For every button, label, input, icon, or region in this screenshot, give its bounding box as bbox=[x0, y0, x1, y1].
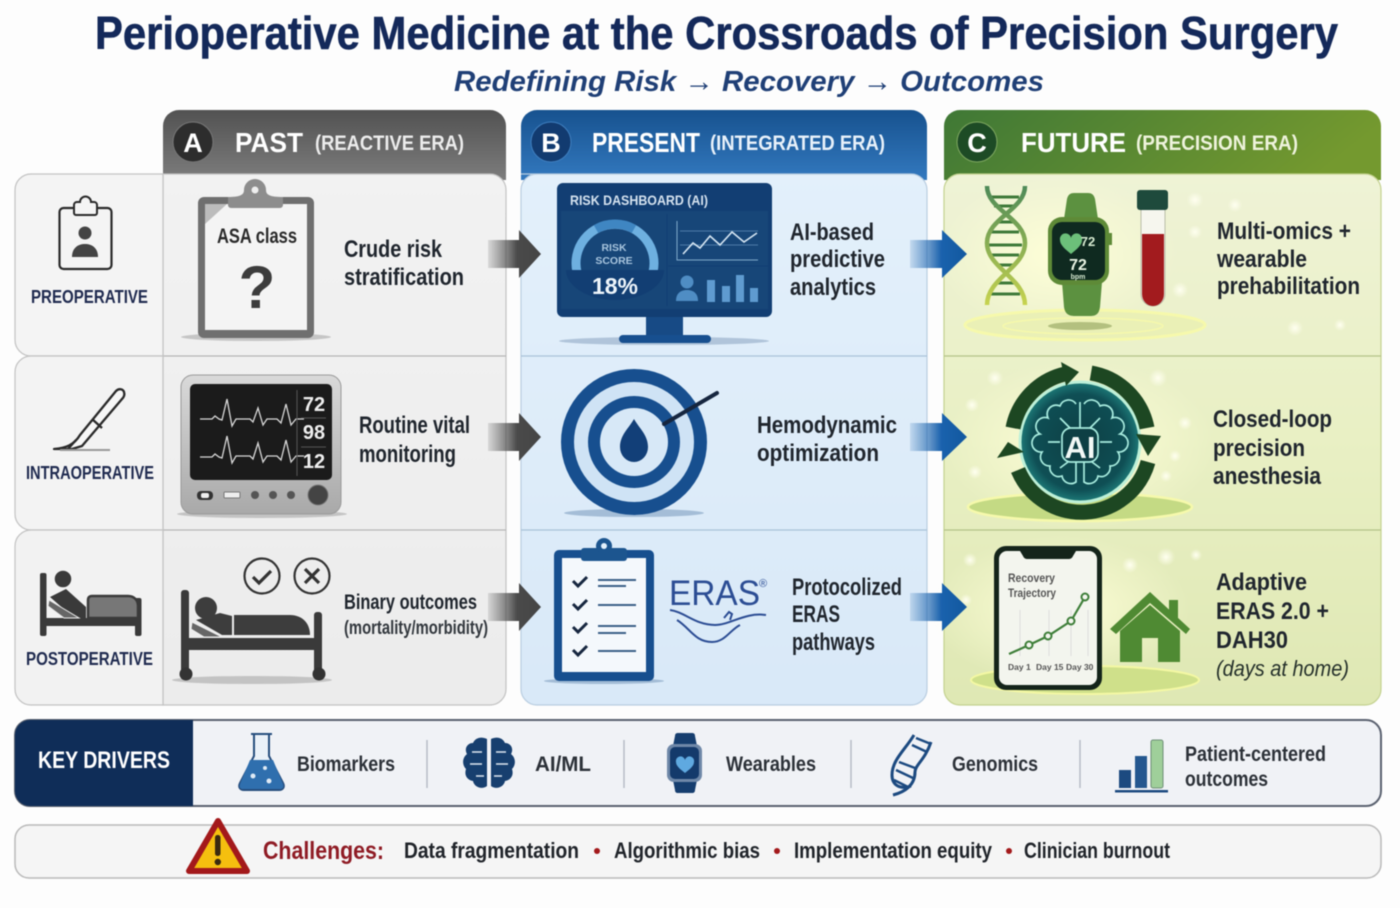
icon: wearable watch bbox=[667, 733, 702, 793]
text: AI-based analytics: predictive bbox=[790, 246, 885, 273]
icon: check and cross bbox=[244, 558, 330, 594]
text: routine vital: monitoring bbox=[359, 441, 456, 468]
icon: blood tube bbox=[1137, 190, 1168, 306]
text: crude risk: Crude risk bbox=[344, 236, 443, 263]
text: adaptive ERAS: Adaptive bbox=[1216, 569, 1307, 596]
icon: recovery phone: Day 1 bbox=[1008, 662, 1031, 672]
icon: risk dashboard monitor bbox=[557, 183, 772, 345]
column header: future: C bbox=[967, 128, 987, 158]
icon: protocol checklist bbox=[544, 538, 664, 684]
text: adaptive ERAS: (days at home) bbox=[1216, 656, 1349, 681]
icon: recovery phone: Day 30 bbox=[1066, 662, 1094, 672]
label: biomarkers: Biomarkers bbox=[297, 753, 395, 776]
icon: warning triangle bbox=[189, 821, 247, 871]
label: genomics: Genomics bbox=[952, 753, 1038, 776]
column header: present bbox=[521, 110, 927, 180]
text: protocolized ERAS: ERAS bbox=[792, 601, 840, 628]
subtitle: Redefining Risk → Recovery → Outcomes bbox=[454, 66, 1044, 98]
text: closed-loop: Closed-loop bbox=[1213, 406, 1332, 433]
text: protocolized ERAS: Protocolized bbox=[792, 574, 902, 601]
arrows: present to future bbox=[910, 230, 967, 631]
panel: present column bbox=[521, 174, 927, 705]
icon: outcome bars bbox=[1115, 740, 1168, 792]
column header: future bbox=[944, 110, 1381, 180]
row label: preoperative bbox=[15, 174, 163, 356]
icon: recovery phone: Day 15 bbox=[1036, 662, 1064, 672]
icon: brain bbox=[463, 738, 515, 788]
text: closed-loop: precision bbox=[1213, 435, 1305, 462]
icon: recovery phone: Trajectory bbox=[1008, 586, 1056, 600]
arrows: past to present bbox=[488, 230, 541, 631]
panel: challenges: Challenges: bbox=[263, 837, 384, 865]
icon: risk dashboard monitor: SCORE bbox=[595, 255, 633, 267]
row label: intraoperative: INTRAOPERATIVE bbox=[26, 463, 154, 483]
icon: scalpel bbox=[54, 389, 124, 450]
text: routine vital: Routine vital bbox=[359, 412, 470, 439]
column header: past: PAST bbox=[235, 127, 303, 158]
icon: vitals monitor bbox=[177, 375, 347, 518]
text: adaptive ERAS bbox=[1216, 569, 1349, 681]
icon: ASA clipboard: ? bbox=[239, 254, 275, 321]
text: AI-based analytics bbox=[790, 219, 885, 301]
column header: past bbox=[163, 110, 506, 180]
text: binary outcomes: (mortality/morbidity) bbox=[344, 618, 488, 639]
icon: recovery phone bbox=[971, 546, 1199, 694]
row label: preoperative: PREOPERATIVE bbox=[31, 287, 148, 307]
key drivers heading: KEY DRIVERS bbox=[38, 747, 170, 774]
icon: risk dashboard monitor: 18% bbox=[592, 273, 638, 299]
icon: closed-loop AI bbox=[968, 362, 1192, 521]
icon: risk dashboard monitor: RISK DASHBOARD (AI) bbox=[570, 192, 708, 208]
text: adaptive ERAS: ERAS 2.0 + bbox=[1216, 598, 1329, 625]
column header: past: (REACTIVE ERA) bbox=[315, 132, 464, 155]
icon: patient in bed bbox=[172, 590, 332, 684]
text: hemodynamic: Hemodynamic bbox=[757, 412, 897, 439]
label: wearables: Wearables bbox=[726, 753, 816, 776]
challenge list bbox=[404, 838, 1171, 863]
label: patient-centered outcomes: outcomes bbox=[1185, 768, 1268, 791]
column header: present: PRESENT bbox=[592, 127, 700, 158]
text: protocolized ERAS: pathways bbox=[792, 629, 875, 656]
challenge list: Data fragmentation bbox=[404, 838, 579, 863]
icon: genomics helix bbox=[892, 735, 931, 795]
text: adaptive ERAS: DAH30 bbox=[1216, 627, 1288, 654]
text: multi-omics: Multi-omics + bbox=[1217, 218, 1351, 245]
panel: past column bbox=[163, 174, 506, 705]
panel: key drivers bbox=[15, 720, 1381, 806]
key drivers heading bbox=[15, 720, 193, 806]
logo: ERAS: ERAS bbox=[669, 574, 760, 613]
text: crude risk bbox=[344, 236, 464, 291]
challenge list: Clinician burnout bbox=[1024, 838, 1171, 863]
icon: recovery phone: Recovery bbox=[1008, 571, 1055, 585]
text: closed-loop bbox=[1213, 406, 1332, 490]
icon: smartwatch: 72 bbox=[1081, 234, 1095, 249]
text: AI-based analytics: AI-based bbox=[790, 219, 874, 246]
text: multi-omics: prehabilitation bbox=[1217, 273, 1360, 300]
text: multi-omics bbox=[1216, 218, 1360, 300]
text: binary outcomes bbox=[344, 591, 488, 639]
column header: future: (PRECISION ERA) bbox=[1136, 132, 1298, 155]
label: AI/ML: AI/ML bbox=[535, 753, 591, 776]
icon: smartwatch: 72 bbox=[1069, 257, 1087, 274]
text: closed-loop: anesthesia bbox=[1213, 463, 1322, 490]
column header: present: (INTEGRATED ERA) bbox=[710, 132, 885, 155]
text: routine vital bbox=[359, 412, 470, 468]
icon: ASA clipboard bbox=[181, 179, 331, 341]
logo: ERAS: ® bbox=[759, 578, 767, 590]
sparkles bbox=[960, 192, 1346, 606]
logo: ERAS bbox=[669, 574, 767, 642]
icon: patient chart bbox=[60, 196, 112, 269]
icon: hemodynamic target bbox=[561, 369, 717, 517]
column header: past: A bbox=[183, 128, 203, 158]
icon: risk dashboard monitor: RISK bbox=[601, 242, 627, 254]
label: patient-centered outcomes bbox=[1185, 743, 1326, 791]
column header: future: FUTURE bbox=[1021, 127, 1126, 158]
icon: home bbox=[1110, 592, 1190, 662]
row label: intraoperative bbox=[15, 356, 163, 530]
challenge list: Implementation equity bbox=[794, 838, 993, 863]
icon: closed-loop AI: AI bbox=[1064, 430, 1096, 465]
panel: future column bbox=[930, 174, 1381, 705]
text: multi-omics: wearable bbox=[1216, 246, 1307, 273]
text: binary outcomes: Binary outcomes bbox=[344, 591, 477, 614]
icon: ASA clipboard: ASA class bbox=[217, 225, 297, 248]
icon: recovering patient bbox=[40, 570, 142, 636]
icon: smartwatch: bpm bbox=[1071, 274, 1085, 281]
icon: vitals monitor: 98 bbox=[303, 422, 325, 444]
icon: smartwatch bbox=[1048, 193, 1112, 316]
text: protocolized ERAS bbox=[792, 574, 902, 656]
label: patient-centered outcomes: Patient-centered bbox=[1185, 743, 1326, 766]
text: hemodynamic: optimization bbox=[757, 440, 879, 467]
row label: postoperative: POSTOPERATIVE bbox=[26, 649, 153, 669]
column header: present: B bbox=[541, 128, 561, 158]
icon: DNA helix bbox=[987, 186, 1025, 305]
icon: halo under devices bbox=[965, 310, 1205, 340]
icon: flask bbox=[239, 734, 284, 790]
icon: vitals monitor: 72 bbox=[303, 394, 325, 416]
challenge list: Algorithmic bias bbox=[614, 838, 760, 863]
text: hemodynamic bbox=[757, 412, 897, 467]
text: AI-based analytics: analytics bbox=[790, 274, 876, 301]
icon: vitals monitor: 12 bbox=[303, 451, 325, 473]
text: crude risk: stratification bbox=[344, 264, 464, 291]
row label: postoperative bbox=[15, 530, 163, 705]
panel: challenges bbox=[15, 821, 1381, 878]
